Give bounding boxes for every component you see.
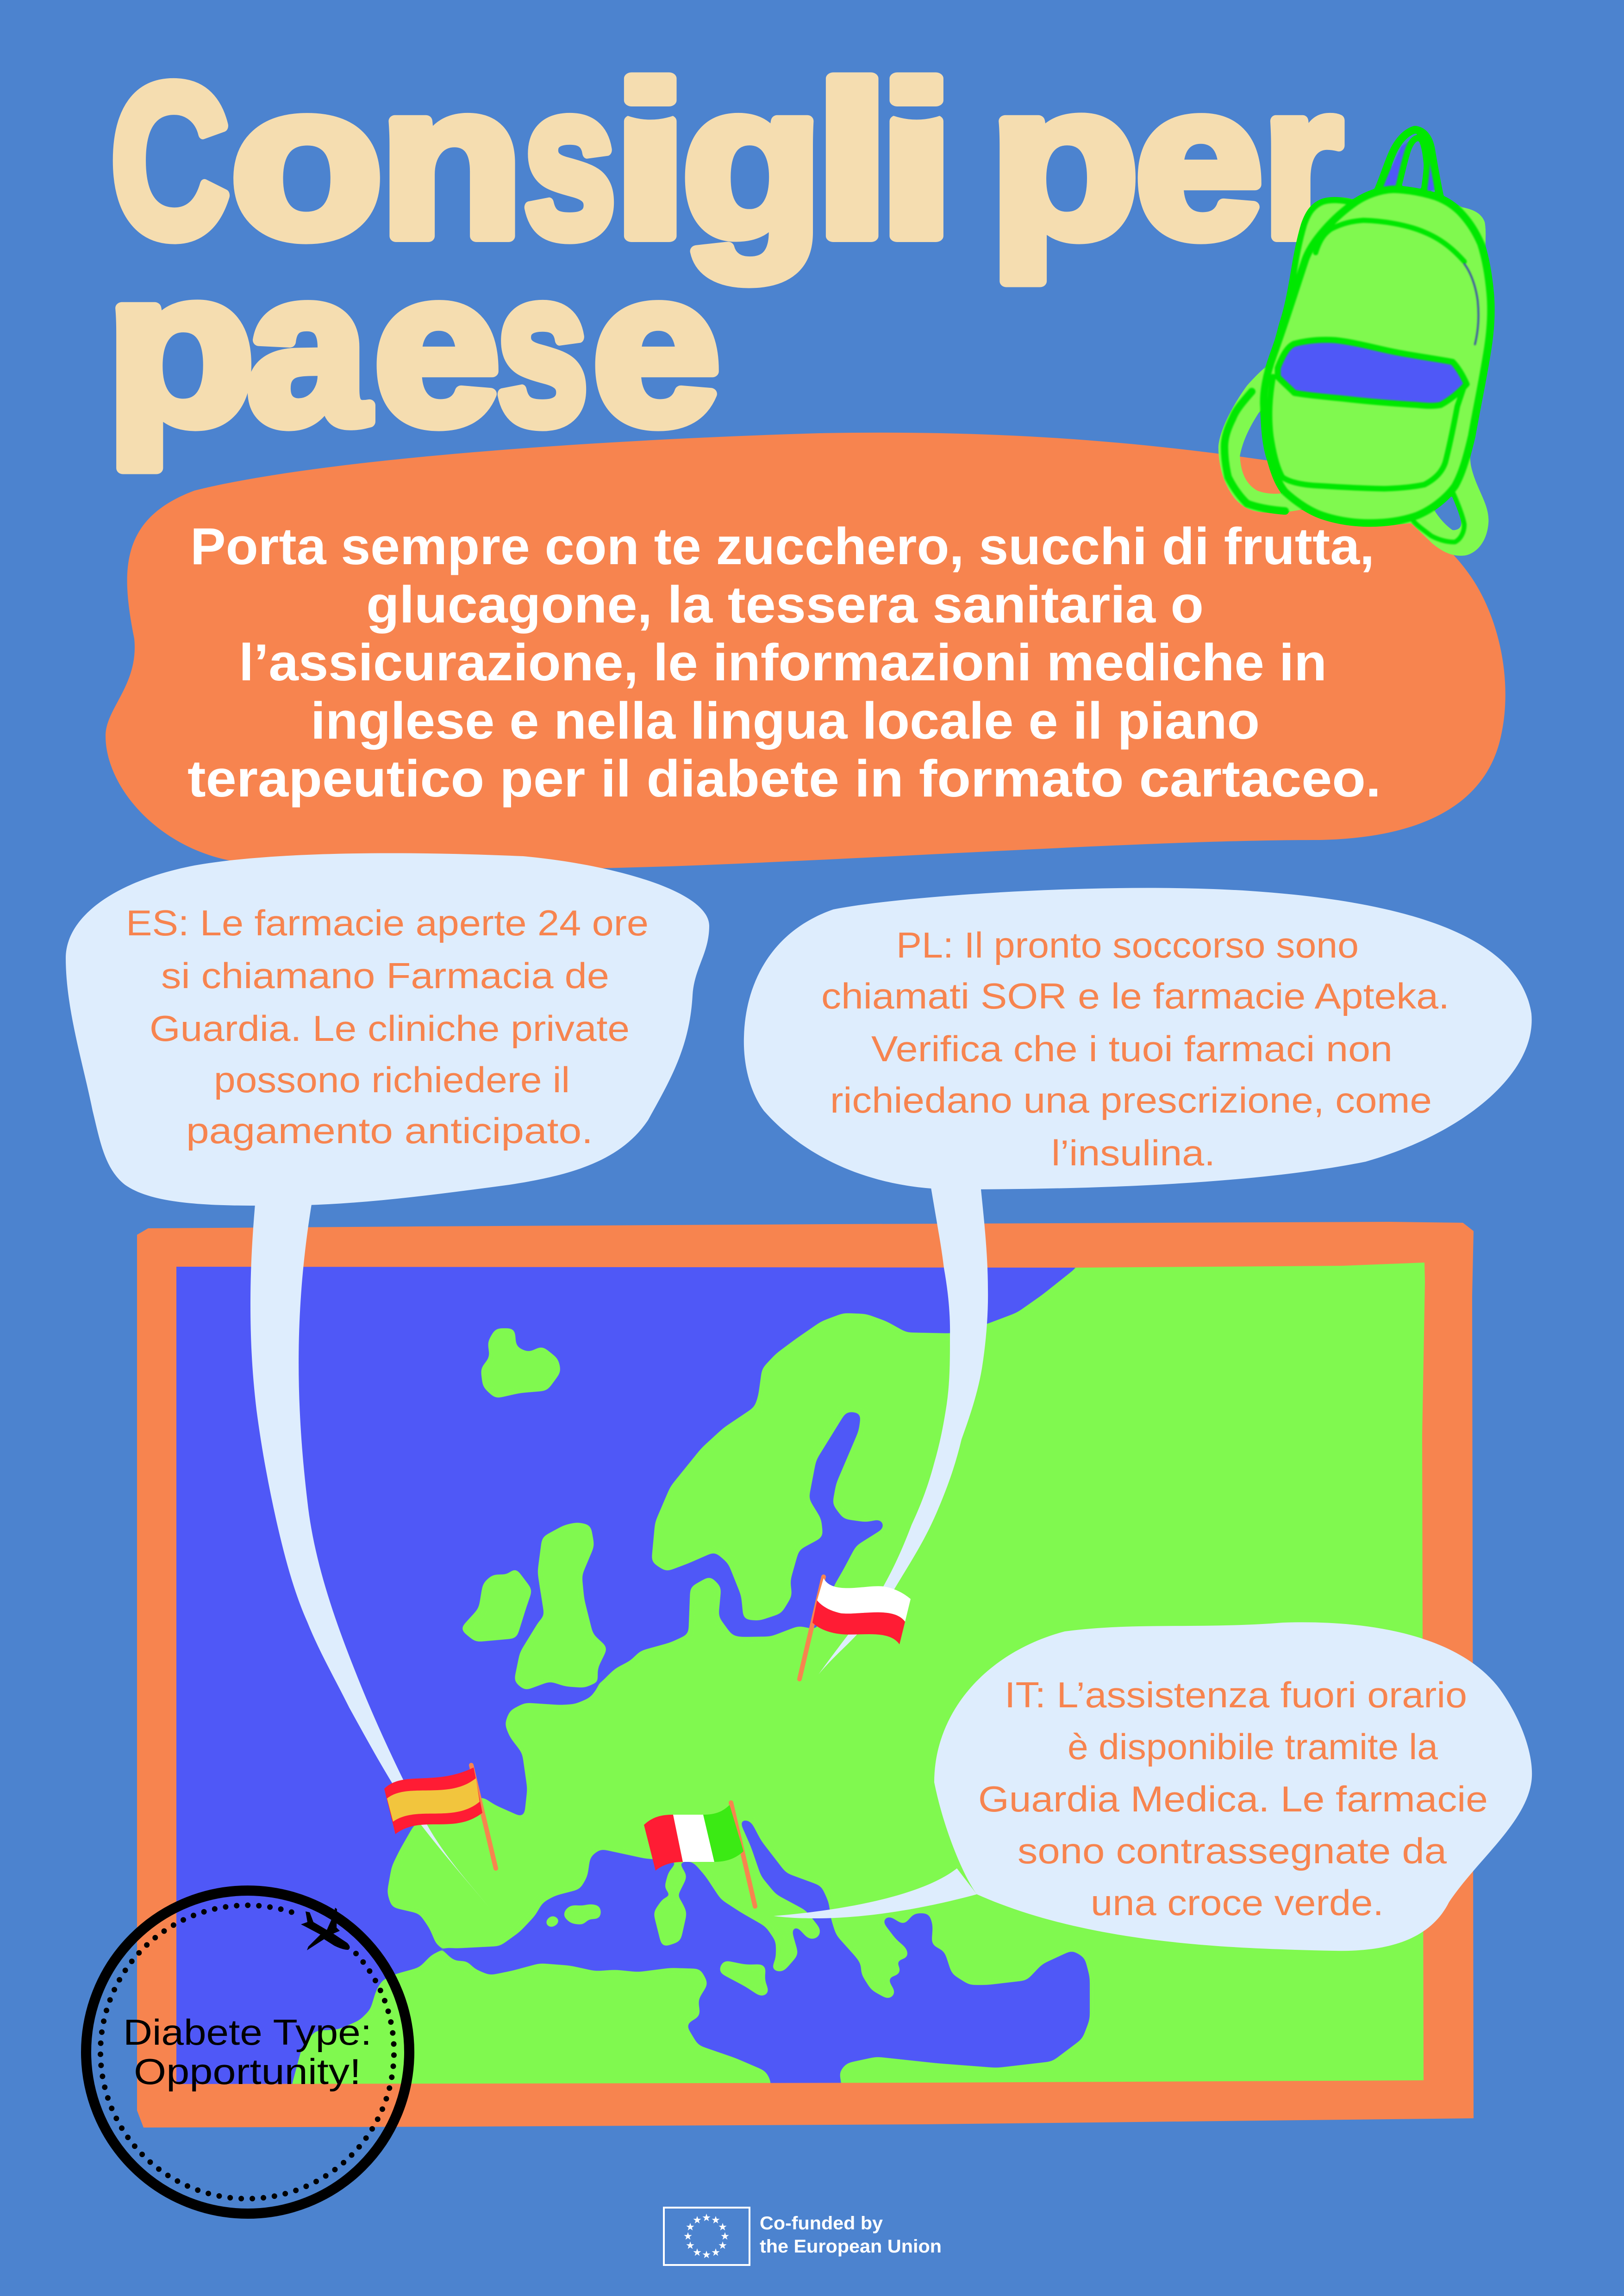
land: Sicily — [718, 1960, 770, 1997]
map frame — [137, 1222, 1474, 2128]
title: g — [682, 39, 823, 284]
EU text: the European Union — [760, 2236, 942, 2257]
stamp text: Opportunity! — [134, 2051, 361, 2092]
advice text: glucagone, la tessera sanitaria o — [366, 576, 1204, 634]
callout: Poland bubble — [744, 888, 1532, 1674]
Italy bubble text: sono contrassegnate da — [1018, 1830, 1447, 1871]
title: l — [814, 39, 890, 282]
callout: Spain bubble — [66, 853, 709, 1908]
Italy bubble body — [934, 1622, 1532, 1951]
Italy bubble pointer — [774, 1868, 977, 1918]
title — [106, 39, 1342, 471]
Poland bubble body — [744, 888, 1532, 1189]
backpack outlines — [1224, 189, 1491, 542]
map sea — [167, 1259, 1430, 2092]
Spain bubble pointer — [250, 1199, 490, 1908]
title: p — [989, 39, 1139, 284]
EU text: Co-funded by — [760, 2213, 883, 2234]
land: Ireland — [460, 1567, 532, 1642]
Spain bubble text: ES: Le farmacie aperte 24 ore — [126, 902, 649, 943]
Italy bubble text: è disponibile tramite la — [1068, 1726, 1438, 1767]
title: r — [1262, 39, 1342, 282]
EU stars — [684, 2214, 729, 2258]
panel: map of Europe — [137, 1222, 1474, 2128]
title: i — [878, 39, 956, 282]
Italy bubble text — [978, 1674, 1488, 1923]
icon: Italian flag — [644, 1803, 755, 1906]
title: p — [106, 226, 255, 471]
stamp outer ring — [86, 1891, 409, 2214]
Poland bubble text: PL: Il pronto soccorso sono — [896, 925, 1359, 965]
title: C — [111, 39, 230, 282]
land: Great Britain — [514, 1522, 608, 1691]
icon: Polish flag — [800, 1577, 911, 1679]
Italy bubble text: IT: L’assistenza fuori orario — [1005, 1674, 1467, 1715]
Poland bubble text: l’insulina. — [1051, 1132, 1215, 1173]
Spain bubble text: si chiamano Farmacia de — [161, 955, 609, 996]
Spain bubble text: Guardia. Le cliniche private — [150, 1008, 630, 1049]
Spain bubble body — [66, 853, 709, 1206]
land: continental Europe and Scandinavia — [387, 1250, 1444, 2101]
backpack body and straps — [1218, 187, 1491, 556]
Poland bubble text — [821, 925, 1449, 1173]
land: Iceland — [481, 1328, 561, 1399]
backpack pocket — [1278, 340, 1467, 406]
Spain bubble text — [126, 902, 649, 1151]
title: e — [374, 226, 500, 469]
stamp dotted ring — [100, 1905, 394, 2199]
Poland bubble pointer — [818, 1185, 988, 1674]
title: s — [523, 39, 616, 282]
land: Corsica — [664, 1861, 687, 1898]
stamp: Diabete Type Opportunity — [86, 1891, 409, 2214]
Poland bubble text: Verifica che i tuoi farmaci non — [871, 1028, 1393, 1069]
icon: Spanish flag — [384, 1765, 496, 1868]
panel: orange advice blob with text — [106, 433, 1505, 870]
title: o — [231, 39, 383, 282]
stamp text: Diabete Type: — [123, 2012, 372, 2053]
callout: Italy bubble — [774, 1622, 1532, 1951]
Spain bubble text: pagamento anticipato. — [186, 1110, 593, 1151]
Italy bubble text: una croce verde. — [1091, 1882, 1384, 1923]
EU flag outline — [664, 2208, 750, 2265]
stamp text — [123, 2012, 372, 2092]
map land — [289, 1250, 1444, 2101]
land: Balearic islands — [543, 1904, 601, 1929]
logo: EU co-funded — [664, 2208, 942, 2265]
advice text: l’assicurazione, le informazioni mediche in — [239, 634, 1327, 691]
land: Sardinia — [653, 1897, 687, 1948]
backpack top handle — [1378, 130, 1440, 195]
title: a — [247, 226, 369, 469]
title: n — [380, 39, 523, 282]
title: e — [1135, 39, 1263, 282]
icon: airplane — [301, 1908, 350, 1950]
icon: green backpack — [1218, 130, 1491, 556]
title: i — [612, 39, 688, 282]
advice text: inglese e nella lingua locale e il piano — [311, 692, 1260, 750]
advice text — [187, 517, 1381, 808]
EU text — [760, 2213, 942, 2257]
land: North Africa — [289, 1950, 771, 2101]
title: s — [496, 226, 588, 469]
Italy bubble text: Guardia Medica. Le farmacie — [978, 1779, 1488, 1819]
title: e — [593, 226, 720, 469]
advice text: terapeutico per il diabete in formato cartaceo. — [187, 750, 1381, 808]
advice text: Porta sempre con te zucchero, succhi di frutta, — [190, 517, 1374, 575]
Spain bubble text: possono richiedere il — [214, 1059, 570, 1100]
Poland bubble text: chiamati SOR e le farmacie Apteka. — [821, 976, 1449, 1016]
Poland bubble text: richiedano una prescrizione, come — [830, 1080, 1432, 1120]
